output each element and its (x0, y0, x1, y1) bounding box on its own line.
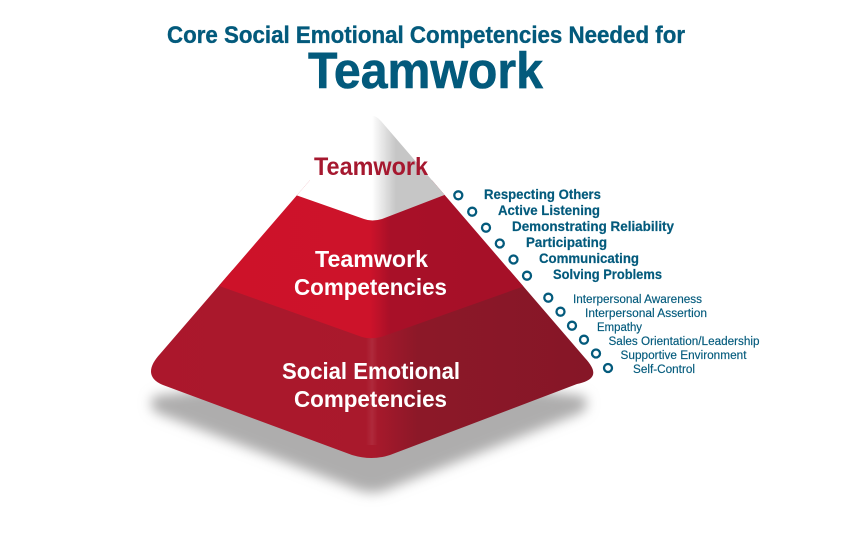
item: supportive environment: Supportive Environment (620, 350, 747, 362)
label: social emotional competencies (282, 358, 460, 412)
label: teamwork competencies: Teamwork (315, 246, 428, 272)
title (167, 22, 685, 99)
item: sales orientation/leadership: Sales Orientation/Leadership (608, 336, 760, 348)
layer: social emotional competencies (151, 270, 594, 458)
item: respecting others: Respecting Others (484, 186, 601, 202)
social emotional competencies list (544, 294, 760, 376)
pyramid shadow (151, 370, 587, 492)
label: teamwork: Teamwork (314, 153, 428, 181)
item: empathy (568, 322, 642, 334)
title line 2: Teamwork (308, 42, 544, 99)
item: interpersonal awareness: Interpersonal Awareness (573, 294, 702, 306)
item: demonstrating reliability: Demonstrating Reliability (512, 218, 674, 234)
item: interpersonal assertion: Interpersonal Assertion (585, 308, 707, 320)
item: active listening: Active Listening (498, 202, 600, 218)
label: teamwork competencies (294, 246, 447, 300)
pyramid (151, 117, 594, 458)
item: communicating: Communicating (539, 250, 639, 266)
item: empathy: Empathy (597, 322, 642, 334)
title line 1: Core Social Emotional Competencies Needed for (167, 22, 685, 49)
label: teamwork competencies: Competencies (294, 274, 447, 300)
item: self-control: Self-Control (633, 364, 695, 376)
layer: teamwork top (297, 117, 444, 220)
item: participating: Participating (526, 234, 607, 250)
item: self-control (604, 364, 695, 376)
item: solving problems: Solving Problems (553, 266, 662, 282)
label: social emotional competencies: Social Emotional (282, 358, 460, 384)
label: social emotional competencies: Competencies (294, 386, 447, 412)
infographic canvas (145, 25, 760, 500)
layer: teamwork competencies (218, 180, 524, 338)
teamwork competencies list (454, 186, 674, 282)
